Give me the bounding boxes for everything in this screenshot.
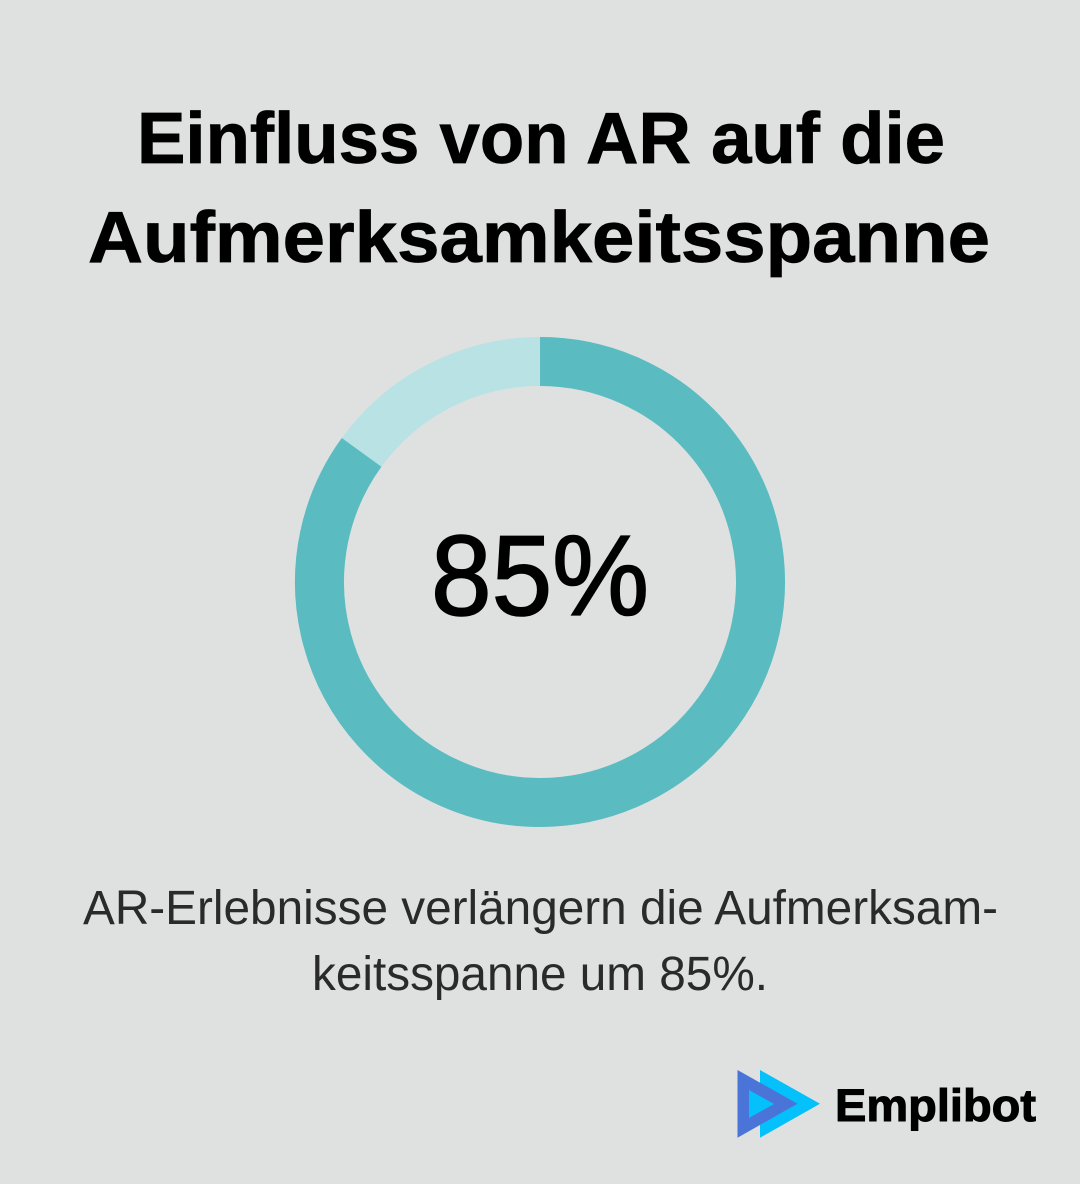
description text: AR-Erlebnisse verlängern die Aufmerksam- [83, 882, 998, 935]
logo: Emplibot [738, 1070, 1036, 1138]
title [88, 99, 990, 278]
title: Einfluss von AR auf die [137, 99, 945, 179]
description text: keitsspanne um 85%. [312, 948, 768, 1001]
donut chart: 85% [319, 362, 760, 802]
icon: play triangles [738, 1070, 820, 1138]
logo wordmark: Emplibot [835, 1080, 1036, 1131]
donut value: 85% [431, 513, 649, 640]
description text [83, 882, 998, 1001]
title: Aufmerksamkeitsspanne [88, 198, 990, 278]
